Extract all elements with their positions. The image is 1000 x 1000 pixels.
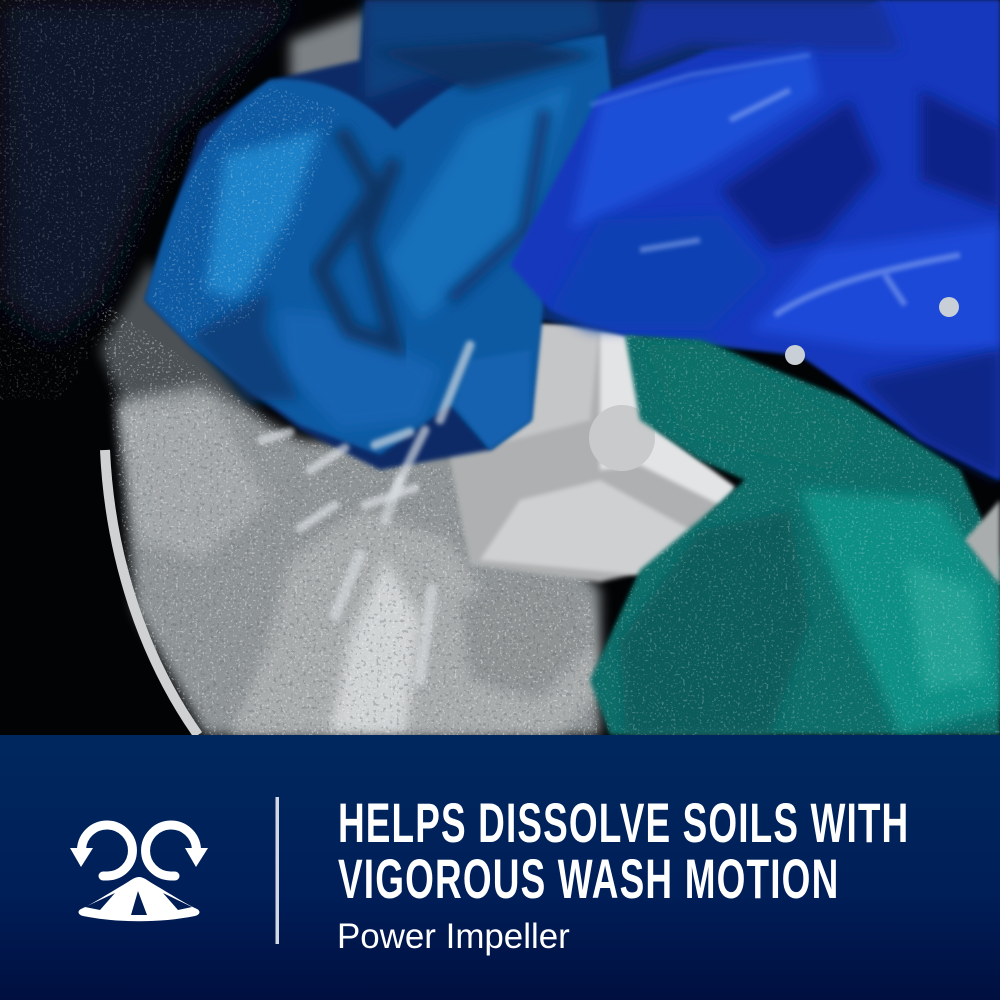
teal cloth, lower right bbox=[590, 335, 1000, 735]
heading: VIGOROUS WASH MOTION bbox=[338, 848, 838, 911]
subheading: Power Impeller bbox=[337, 918, 570, 956]
shirt button, left bbox=[785, 345, 805, 365]
heading bbox=[338, 792, 908, 911]
dark underlay beneath clothes bbox=[145, 0, 1000, 480]
bright water splash, lower middle bbox=[120, 400, 600, 735]
shirt button, right bbox=[939, 297, 959, 317]
photo: clothes and water in washer drum bbox=[0, 0, 1000, 735]
water foam at right edge bbox=[965, 500, 1000, 585]
drum rim, silver band bbox=[105, 450, 198, 735]
medium blue clothes, upper middle bbox=[145, 0, 612, 455]
grey water pool bbox=[118, 385, 600, 735]
icon: power impeller with rotation arrows bbox=[70, 825, 208, 921]
left rotation arrow bbox=[70, 825, 132, 876]
foam patches behind clothes bbox=[95, 5, 366, 418]
impeller bbox=[79, 877, 199, 921]
impeller body bbox=[448, 325, 735, 582]
drum wall speckle bbox=[0, 0, 296, 400]
caption band bbox=[0, 735, 1000, 1000]
right rotation arrow bbox=[146, 825, 208, 876]
impeller hub bbox=[589, 405, 655, 471]
bright blue shirt, upper right bbox=[510, 0, 1000, 480]
divider bbox=[276, 797, 279, 944]
water speckle bbox=[100, 300, 620, 735]
foam bubbles on left cloth bbox=[152, 86, 338, 340]
splash over cloth hem bbox=[262, 345, 470, 680]
heading: HELPS DISSOLVE SOILS WITH bbox=[338, 792, 908, 855]
teal cloth speckle bbox=[590, 335, 1000, 735]
dark blue drum wall, top left bbox=[0, 0, 300, 340]
